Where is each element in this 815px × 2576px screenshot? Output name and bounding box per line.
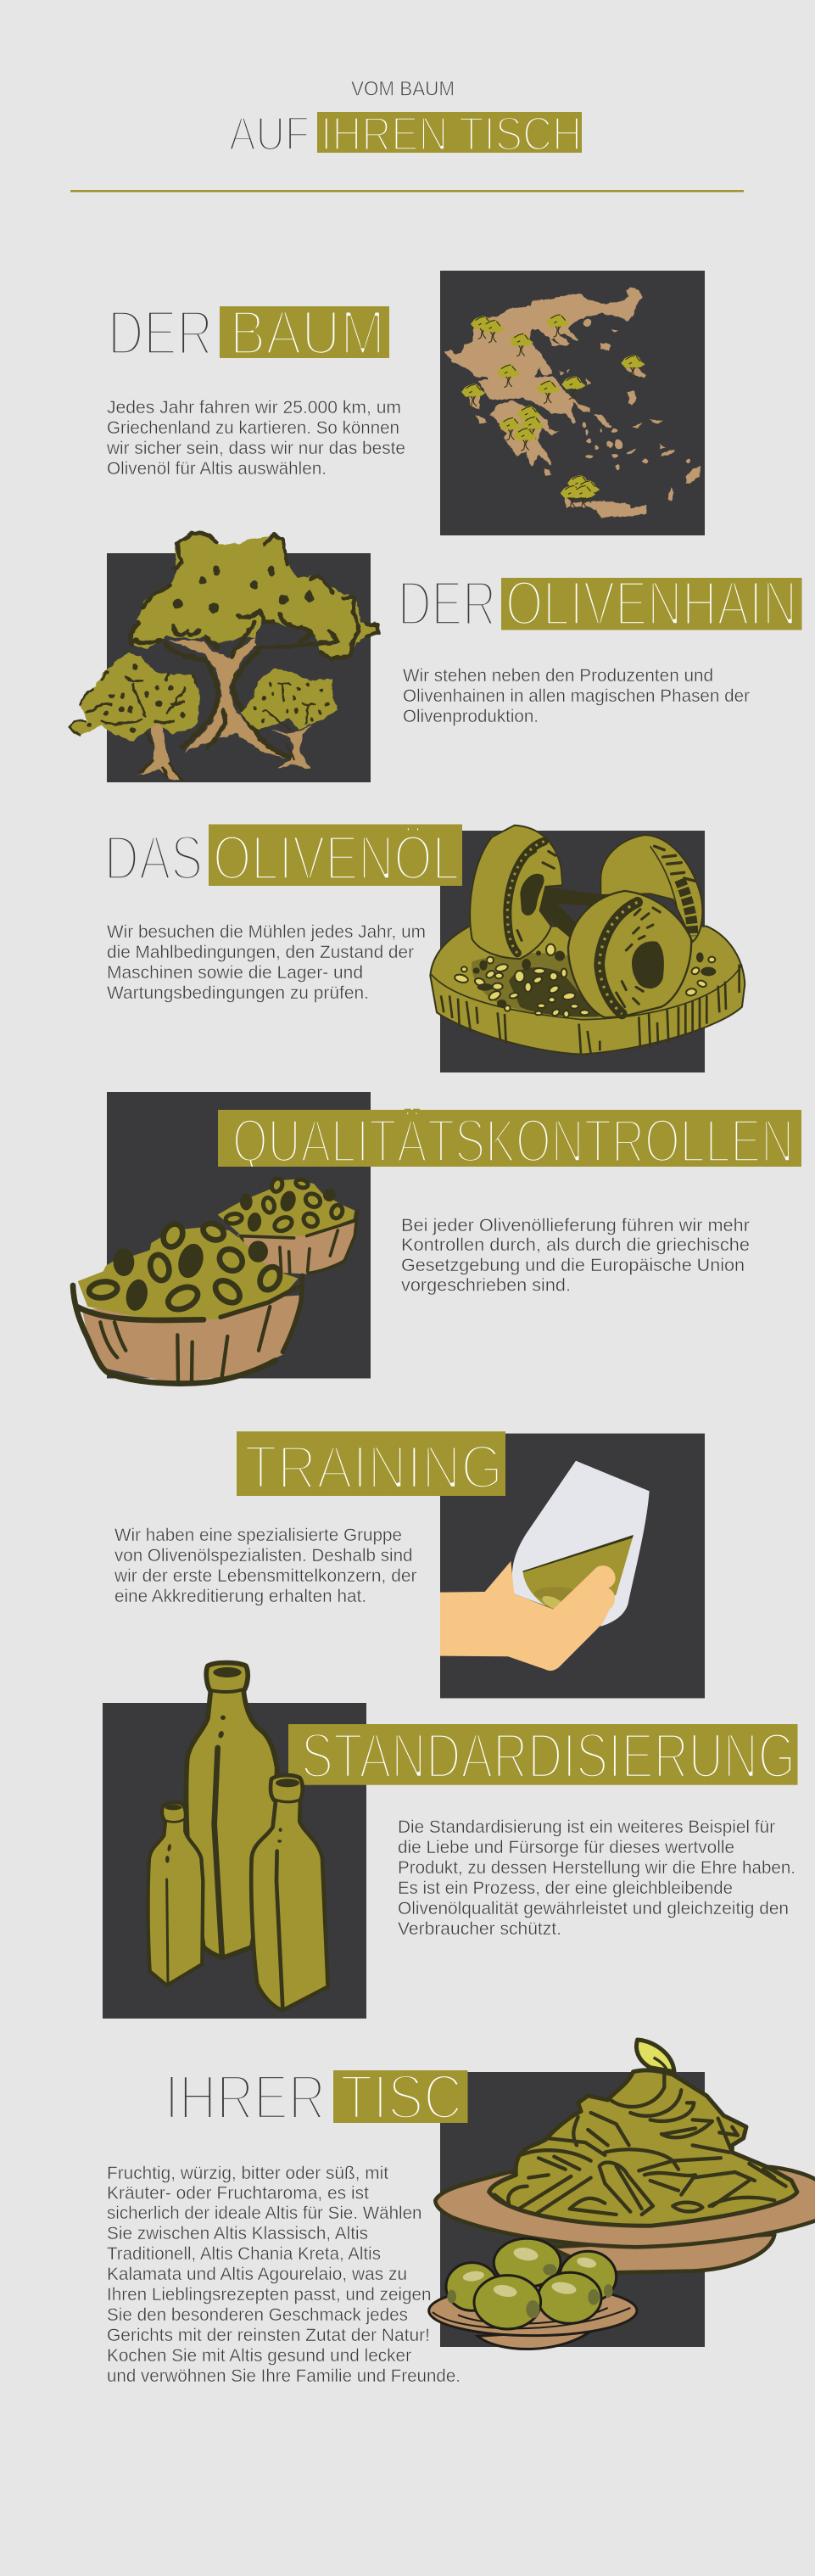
heading: Der Olivenhain: DER [398,568,496,638]
text: Training: von Olivenölspezialisten. Deshalb sind [114,1545,412,1565]
dish [477,2329,594,2349]
text: Ihrer Tisch: Fruchtig, würzig, bitter oder süß, mit [107,2163,388,2183]
text: Das Olivenöl: Wartungsbedingungen zu prüfen. [107,983,369,1003]
text: Ihrer Tisch: Kalamata und Altis Agourelaio, was zu [107,2264,407,2284]
section: Der Olivenhain [70,533,801,782]
text: Training: Wir haben eine spezialisierte Gruppe [114,1525,402,1545]
text: Qualitätskontrollen: Kontrollen durch, als durch die griechische [401,1235,750,1255]
text: Qualitätskontrollen: Gesetzgebung und die Europäische Union [401,1255,745,1275]
icon: plate of food and dish of olives [429,2040,815,2349]
text: Der Olivenhain: Olivenproduktion. [403,706,539,726]
text: Das Olivenöl [107,921,426,1003]
heading: Das Olivenöl: DAS [104,823,203,893]
text: Ihrer Tisch: Traditionell, Altis Chania Kreta, Altis [107,2243,381,2264]
text: Der Olivenhain: Olivenhainen in allen magischen Phasen der [403,686,750,706]
text: Ihrer Tisch: Kräuter- oder Fruchtaroma, es ist [107,2182,369,2203]
small basket [237,1222,356,1274]
heading: Ihrer Tisch [165,2062,468,2132]
big tree canopy [131,533,379,659]
glass [512,1461,650,1627]
heading: Ihrer Tisch: TISC [340,2062,462,2132]
large basket [82,1296,303,1383]
text: Das Olivenöl: Maschinen sowie die Lager- und [107,962,363,983]
icon: millstones [430,826,745,1055]
front wheel hole [632,941,664,988]
title highlight bar [317,112,582,153]
text: Ihrer Tisch: sicherlich der ideale Altis für Sie. Wählen [107,2203,422,2223]
heading: Das Olivenöl: OLIVENÖL [213,823,460,893]
left wheel [470,826,562,959]
text: Ihrer Tisch: Sie den besonderen Geschmack jedes [107,2304,408,2325]
icon: big bottle [187,1663,277,1957]
panel: olive grove [107,553,371,782]
title kicker: VOM BAUM [351,78,455,100]
big tree trunk [168,638,286,758]
section: Standardisierung [103,1663,797,2019]
heading: Das Olivenöl [104,823,462,893]
heading: Der Baum: DER [108,297,213,368]
title highlighted words: IHREN TISCH [321,107,582,161]
left tree [138,723,182,782]
heading: Der Baum: BAUM [230,297,385,368]
text: Standardisierung: Es ist ein Prozess, der eine gleichbleibende [398,1878,733,1898]
text: Ihrer Tisch: Sie zwischen Altis Klassisch, Altis [107,2223,368,2243]
panel: baskets [107,1092,371,1378]
text: Standardisierung: Verbraucher schützt. [398,1918,561,1939]
icon: olive trees [70,533,379,782]
panel: plate [440,2072,705,2347]
title main: AUF [229,107,310,161]
panel: bottles [103,1703,366,2019]
text: Der Baum: Griechenland zu kartieren. So können [107,417,399,438]
text: Training: wir der erste Lebensmittelkonzern, der [114,1565,417,1586]
rear wheel [600,835,702,942]
section: Training [114,1431,705,1699]
text: Training [114,1525,417,1606]
title block [229,78,582,161]
text: Der Baum: Olivenöl für Altis auswählen. [107,458,327,479]
icon: hand holding glass [440,1461,650,1671]
text: Der Olivenhain: Wir stehen neben den Produzenten und [403,665,713,686]
text: Ihrer Tisch [107,2163,461,2386]
text: Der Olivenhain [403,665,750,726]
text: Qualitätskontrollen [401,1215,750,1295]
heading: Der Baum [108,297,389,368]
text: Qualitätskontrollen: vorgeschrieben sind. [401,1274,571,1295]
axle [536,886,605,938]
text: Der Baum [106,397,405,479]
text: Das Olivenöl: die Mahlbedingungen, den Zustand der [107,942,414,962]
text: Training: eine Akkreditierung erhalten hat. [114,1586,366,1606]
left wheel hole [520,874,544,916]
text: Standardisierung: Produkt, zu dessen Herstellung wir die Ehre haben. [398,1857,795,1878]
map of Greece with trees [444,288,701,518]
section: Ihrer Tisch [107,2040,815,2386]
heading: Ihrer Tisch: IHRER [165,2062,326,2132]
right tree [271,725,311,769]
text: Standardisierung: die Liebe und Fürsorge für dieses wertvolle [398,1837,734,1857]
hand [440,1561,616,1671]
panel: tasting glass [440,1434,705,1699]
mill base [430,927,745,1055]
oil [522,1535,634,1610]
text: Der Baum: Jedes Jahr fahren wir 25.000 km, um [107,397,401,417]
section: Das Olivenöl [104,823,745,1072]
plate foot [551,2234,774,2272]
leaf [636,2040,674,2072]
section: Der Baum [106,271,705,535]
text: Ihrer Tisch: und verwöhnen Sie Ihre Familie und Freunde. [107,2366,461,2386]
panel: olive mill [440,831,705,1072]
food [489,2070,797,2226]
front wheel [568,891,691,1017]
text: Ihrer Tisch: Ihren Lieblingsrezepten passt, und zeigen [107,2284,431,2304]
text: Das Olivenöl: Wir besuchen die Mühlen jedes Jahr, um [107,921,426,942]
text: Standardisierung: Die Standardisierung ist ein weiteres Beispiel für [398,1817,775,1837]
panel: Greece map [440,271,705,535]
bottle left [148,1802,203,1985]
crushed olives [472,953,605,1017]
divider line [70,190,744,192]
text: Standardisierung: Olivenölqualität gewährleistet und gleichzeitig den [398,1898,789,1918]
text: Qualitätskontrollen: Bei jeder Olivenöllieferung führen wir mehr [401,1215,750,1235]
olives [446,2238,617,2329]
bottle right [251,1775,328,2010]
text: Ihrer Tisch: Kochen Sie mit Altis gesund und lecker [107,2345,411,2366]
section: Qualitätskontrollen [73,1092,801,1384]
icons: smaller bottles [148,1775,328,2010]
heading: Training: TRAINING [244,1434,503,1502]
text: Ihrer Tisch: Gerichts mit der reinsten Zutat der Natur! [107,2325,430,2345]
text: Der Baum: wir sicher sein, dass wir nur das beste [106,438,405,458]
plate brim [435,2166,815,2247]
icon: olive baskets [73,1177,358,1384]
text: Standardisierung [398,1817,795,1939]
